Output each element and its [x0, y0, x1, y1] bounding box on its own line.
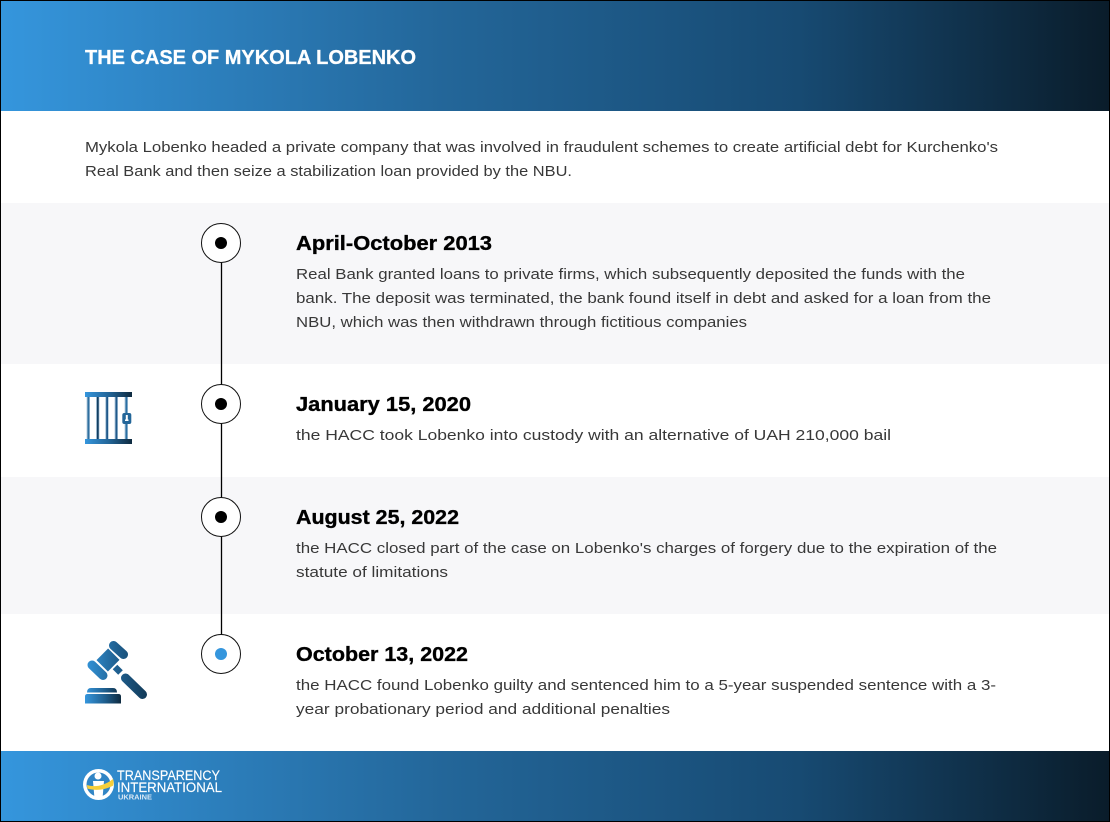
- event: October 13, 2022: the HACC found Lobenko guilty and sentenced him to a 5-year suspended sentence with a 3-: [296, 677, 996, 694]
- event: April-October 2013: Real Bank granted loans to private firms, which subsequently deposited the funds with the: [296, 266, 965, 283]
- event: January 15, 2020: [296, 394, 891, 444]
- header banner: [0, 0, 1110, 111]
- event: August 25, 2022: the HACC closed part of the case on Lobenko's charges of forgery due to the expiration of the: [296, 540, 997, 557]
- intro text: [85, 139, 998, 180]
- event: January 15, 2020: January 15, 2020: [296, 394, 471, 416]
- title: THE CASE OF MYKOLA LOBENKO: [85, 46, 416, 69]
- timeline marker: April-October 2013: [202, 224, 240, 262]
- event: August 25, 2022: statute of limitations: [296, 564, 448, 581]
- event: April-October 2013: [296, 233, 991, 331]
- timeline marker: January 15, 2020: [202, 384, 240, 424]
- event: April-October 2013: bank. The deposit was terminated, the bank found itself in debt and asked for a loan from the: [296, 290, 991, 307]
- event: October 13, 2022: October 13, 2022: [296, 644, 468, 666]
- footer banner: [0, 751, 1110, 822]
- logo: Transparency International Ukraine: INTERNATIONAL: [117, 780, 222, 795]
- intro text: Real Bank and then seize a stabilization loan provided by the NBU.: [85, 163, 572, 180]
- event: August 25, 2022: [296, 507, 997, 581]
- event: August 25, 2022: August 25, 2022: [296, 507, 459, 529]
- timeline marker: October 13, 2022: [202, 634, 240, 674]
- intro text: Mykola Lobenko headed a private company that was involved in fraudulent schemes to create artificial debt for Kurchenko's: [85, 139, 998, 156]
- logo: Transparency International Ukraine: [83, 768, 222, 802]
- timeline line: [220, 262, 222, 635]
- event: April-October 2013: April-October 2013: [296, 233, 492, 255]
- icon: jail bars: [85, 392, 132, 444]
- event: October 13, 2022: [296, 644, 996, 718]
- logo: Transparency International Ukraine: UKRAINE: [118, 794, 152, 802]
- logo: Transparency International Ukraine: TRANSPARENCY: [117, 768, 220, 783]
- timeline marker: August 25, 2022: [202, 498, 240, 536]
- event: January 15, 2020: the HACC took Lobenko into custody with an alternative of UAH 210,000 bail: [296, 427, 891, 444]
- event: October 13, 2022: year probationary period and additional penalties: [296, 701, 670, 718]
- event: April-October 2013: NBU, which was then withdrawn through fictitious companies: [296, 314, 747, 331]
- icon: gavel: [85, 646, 142, 704]
